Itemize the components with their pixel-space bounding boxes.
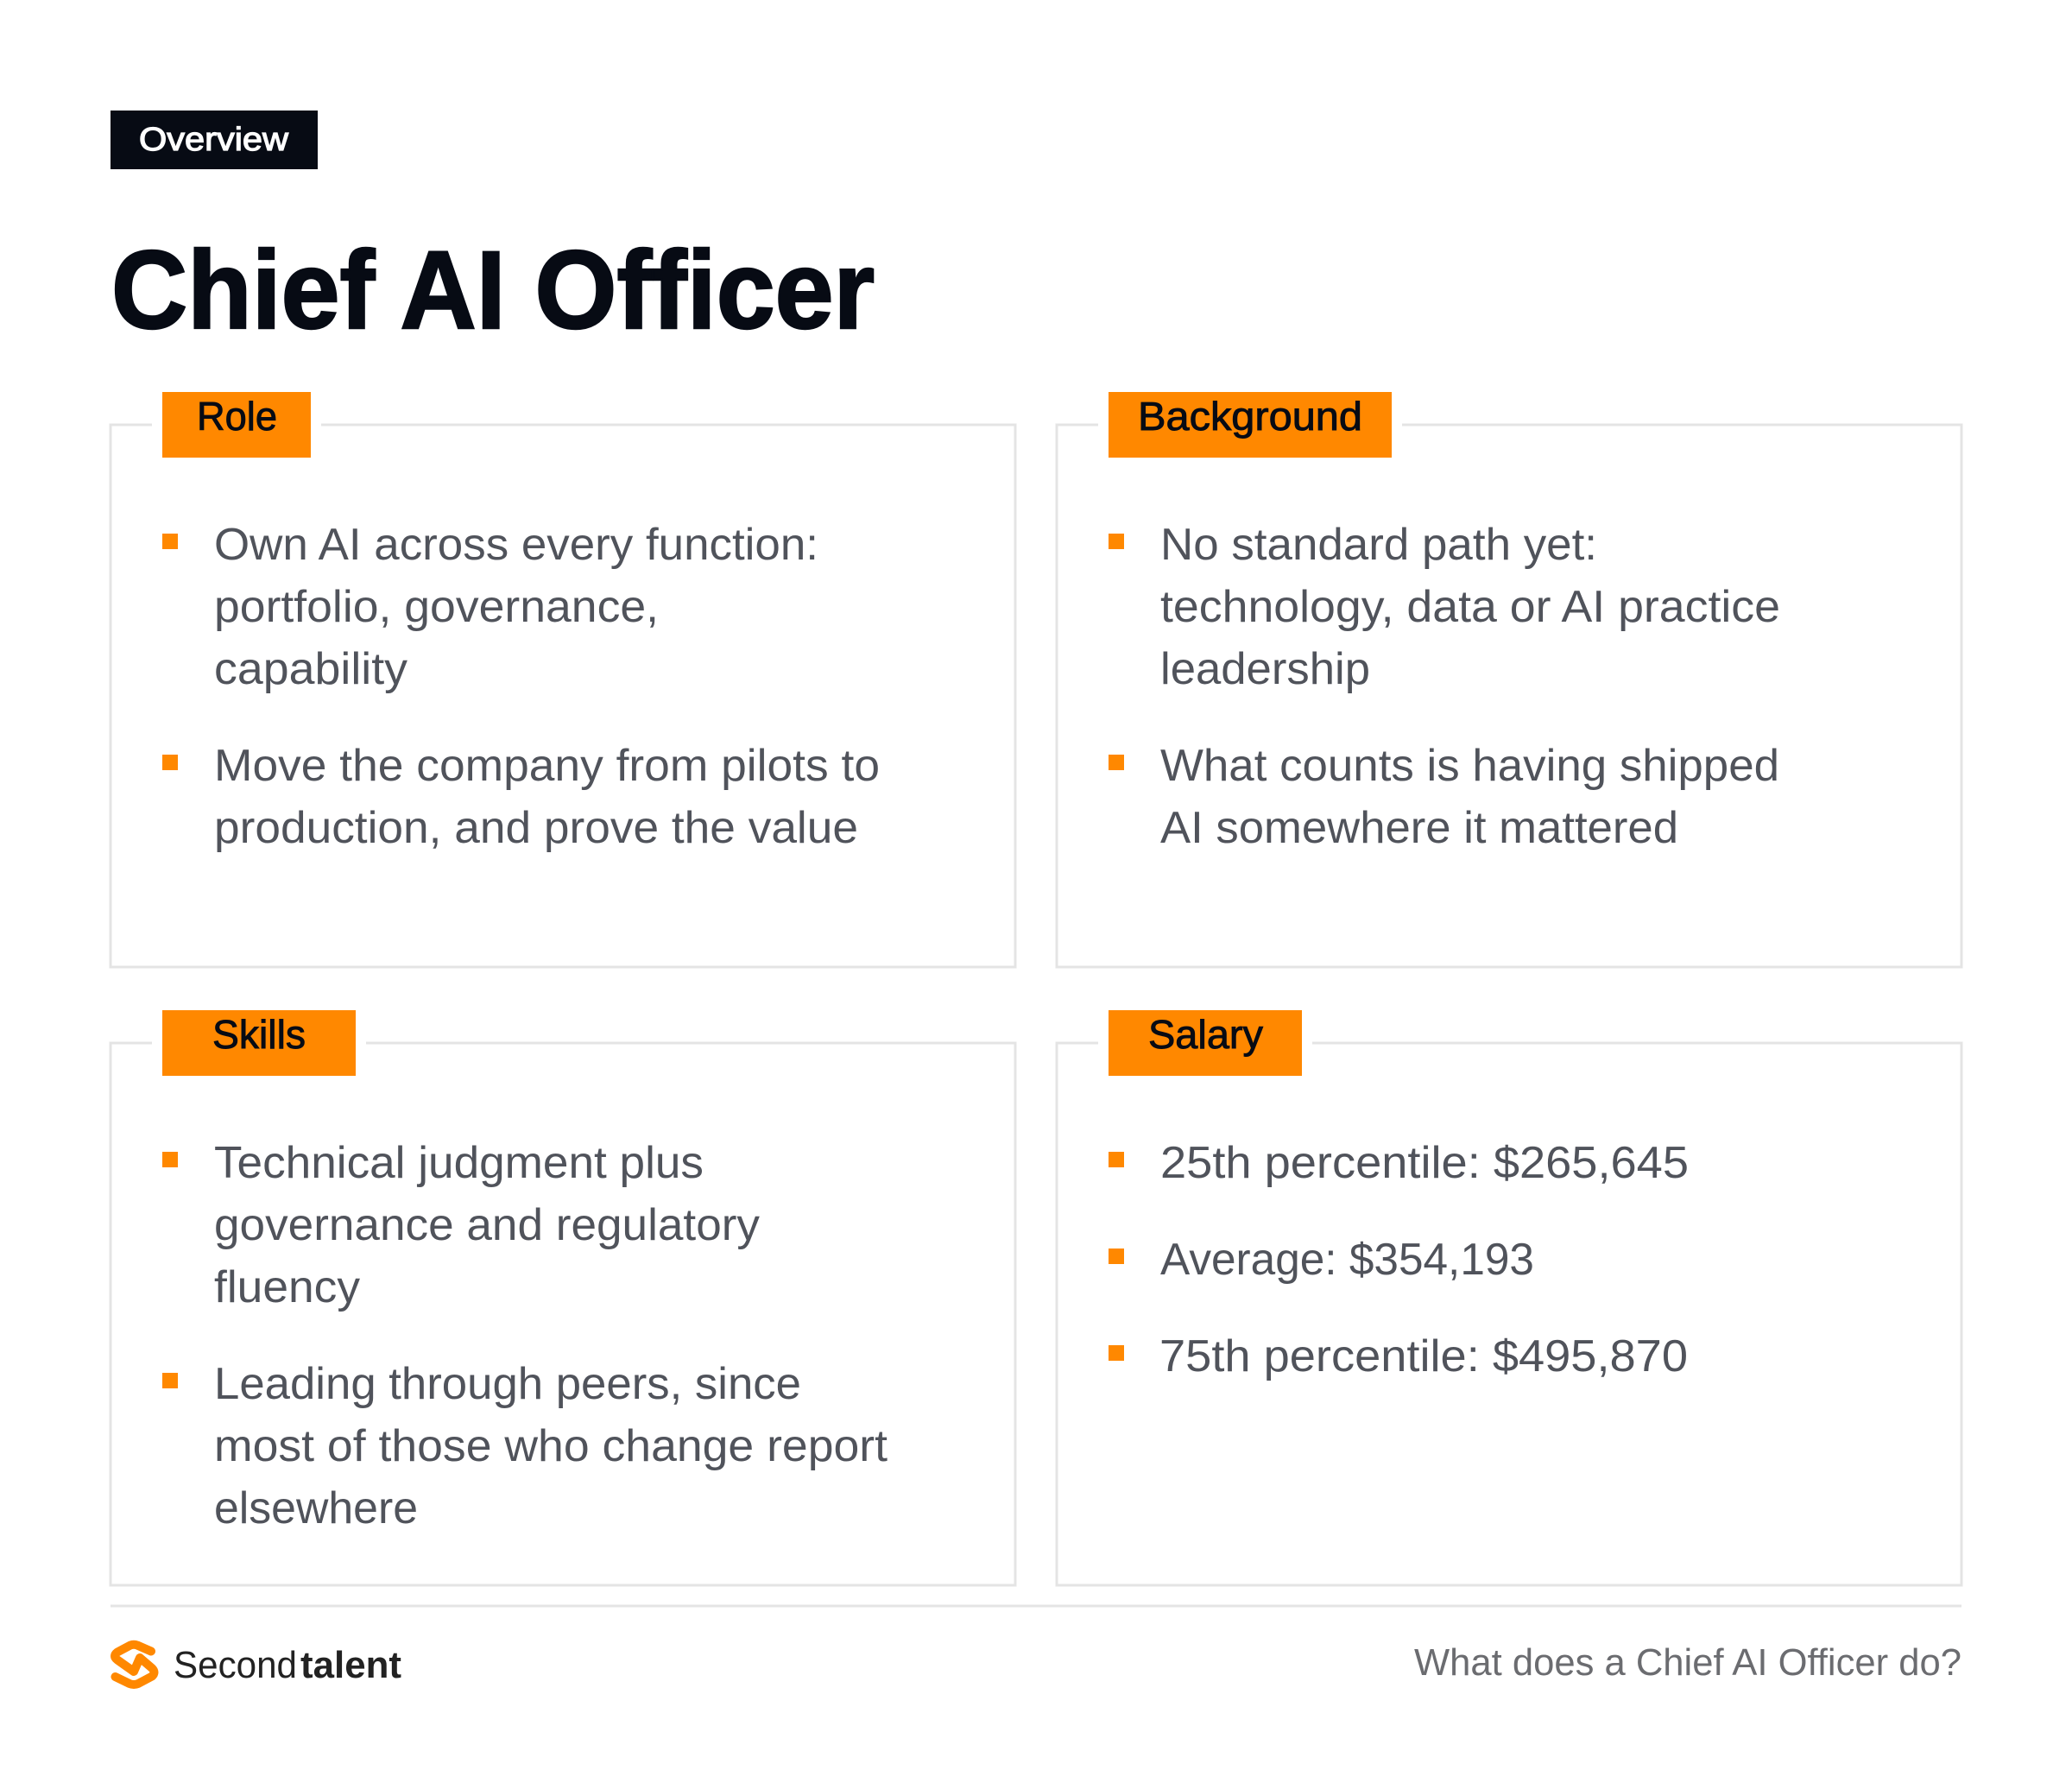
heading: salary: Salary: [1148, 1012, 1263, 1057]
heading: skills: [162, 1010, 356, 1076]
bullet list: salary: 25th percentile: $265,645: [1160, 1138, 1689, 1188]
bullet list: skills: elsewhere: [214, 1483, 418, 1533]
bullet list: role: [162, 520, 880, 853]
bullet list: skills: governance and regulatory: [214, 1200, 760, 1250]
tag: overview: [111, 111, 318, 169]
bullet list: role: production, and prove the value: [214, 803, 858, 853]
logo wordmark: talent: [300, 1644, 401, 1686]
bullet list: role: portfolio, governance,: [214, 582, 659, 632]
panel: salary: [1057, 1010, 1961, 1585]
bullet list: salary: Average: $354,193: [1160, 1235, 1534, 1285]
heading: background: Background: [1138, 394, 1362, 439]
bullet list: skills: Leading through peers, since: [214, 1359, 801, 1409]
tag: overview: Overview: [139, 122, 289, 158]
bullet list: skills: [162, 1138, 888, 1533]
title: Chief AI Officer: [111, 229, 875, 352]
heading: role: Role: [197, 394, 277, 439]
heading: role: [162, 392, 311, 458]
panel: role: [111, 392, 1015, 967]
heading: salary: [1109, 1010, 1302, 1076]
bullet list: skills: Technical judgment plus: [214, 1138, 704, 1188]
bullet list: background: What counts is having shipped: [1160, 741, 1779, 791]
bullet list: background: AI somewhere it mattered: [1160, 803, 1678, 853]
footer caption: What does a Chief AI Officer do?: [1414, 1641, 1961, 1684]
bullet list: background: [1109, 520, 1780, 853]
bullet list: role: capability: [214, 644, 407, 694]
panel: skills: [111, 1010, 1015, 1585]
bullet list: skills: fluency: [214, 1262, 360, 1312]
bullet list: salary: [1109, 1138, 1689, 1381]
heading: background: [1109, 392, 1392, 458]
bullet list: background: technology, data or AI practice: [1160, 582, 1780, 632]
bullet list: skills: most of those who change report: [214, 1421, 888, 1471]
icon: secondtalent logo: [115, 1645, 154, 1685]
panel: background: [1057, 392, 1961, 967]
logo wordmark: [174, 1644, 401, 1686]
bullet list: salary: 75th percentile: $495,870: [1159, 1331, 1688, 1381]
bullet list: background: leadership: [1160, 644, 1370, 694]
logo wordmark: Second: [174, 1644, 297, 1686]
bullet list: role: Move the company from pilots to: [214, 741, 880, 791]
heading: skills: Skills: [212, 1012, 306, 1057]
bullet list: role: Own AI across every function:: [214, 520, 818, 570]
bullet list: background: No standard path yet:: [1160, 520, 1597, 570]
